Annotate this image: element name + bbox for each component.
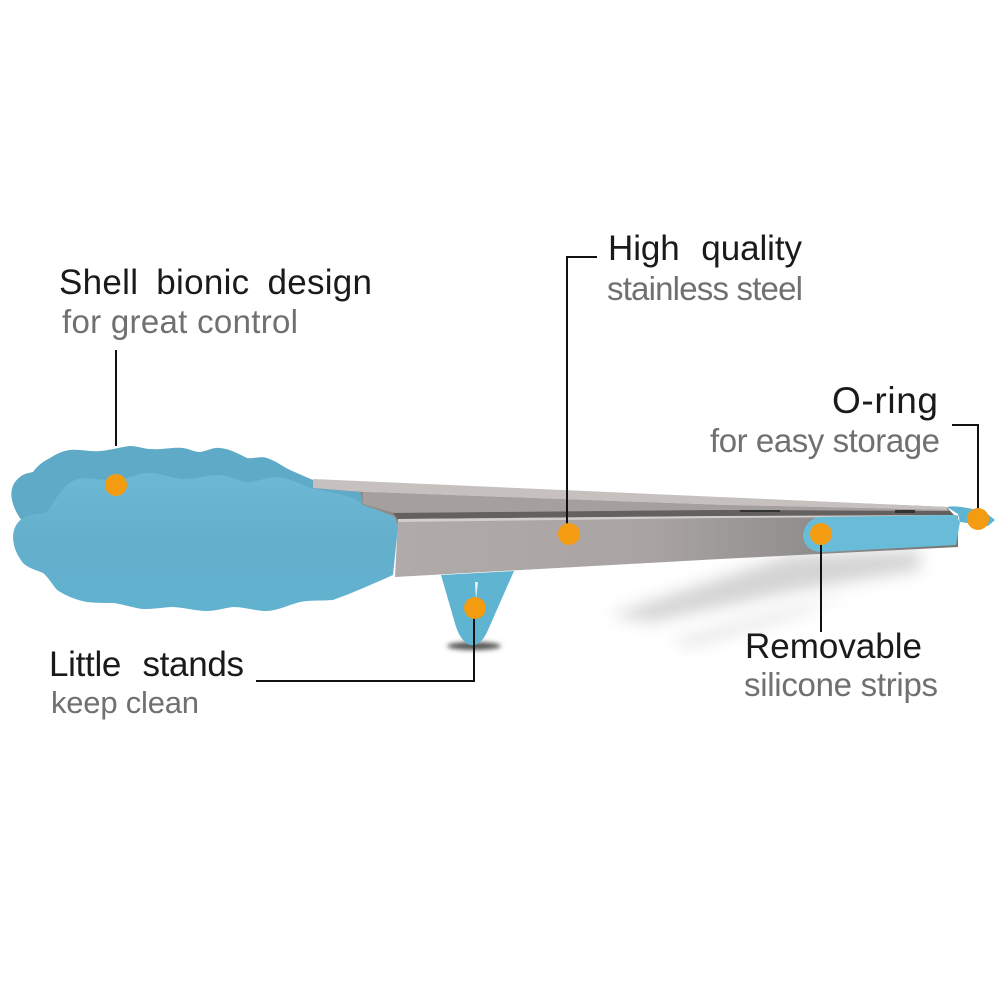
upper steel arm [313, 479, 958, 525]
O-ring [947, 506, 995, 526]
back silicone shell [11, 446, 363, 540]
tongs [11, 446, 995, 650]
callout: little stands: keep clean [51, 685, 199, 720]
callout: shell bionic design: Shell bionic design [59, 263, 372, 302]
removable silicone strip [803, 515, 960, 552]
callout: shell bionic design: for great control [62, 303, 298, 340]
callout: o-ring: for easy storage [710, 422, 940, 459]
little stand [441, 571, 514, 645]
stand foot shadow [447, 642, 501, 650]
callout: little stands: Little stands [49, 645, 244, 684]
callout: removable strips: silicone strips [744, 666, 938, 703]
callout: removable strips: Removable [745, 627, 922, 666]
cast shadow of tongs [610, 550, 920, 648]
callout: high quality [607, 229, 803, 307]
marker dots [105, 474, 989, 619]
callout: o-ring [710, 380, 940, 459]
callout: high quality: stainless steel [607, 270, 803, 307]
callout: o-ring: O-ring [832, 380, 938, 421]
front silicone shell [13, 473, 398, 611]
lower steel arm [395, 515, 958, 577]
callout: removable strips [744, 627, 938, 703]
leader lines [116, 257, 978, 681]
callout: high quality: High quality [608, 229, 802, 268]
callout: little stands [49, 645, 244, 720]
callout: shell bionic design [59, 263, 372, 340]
